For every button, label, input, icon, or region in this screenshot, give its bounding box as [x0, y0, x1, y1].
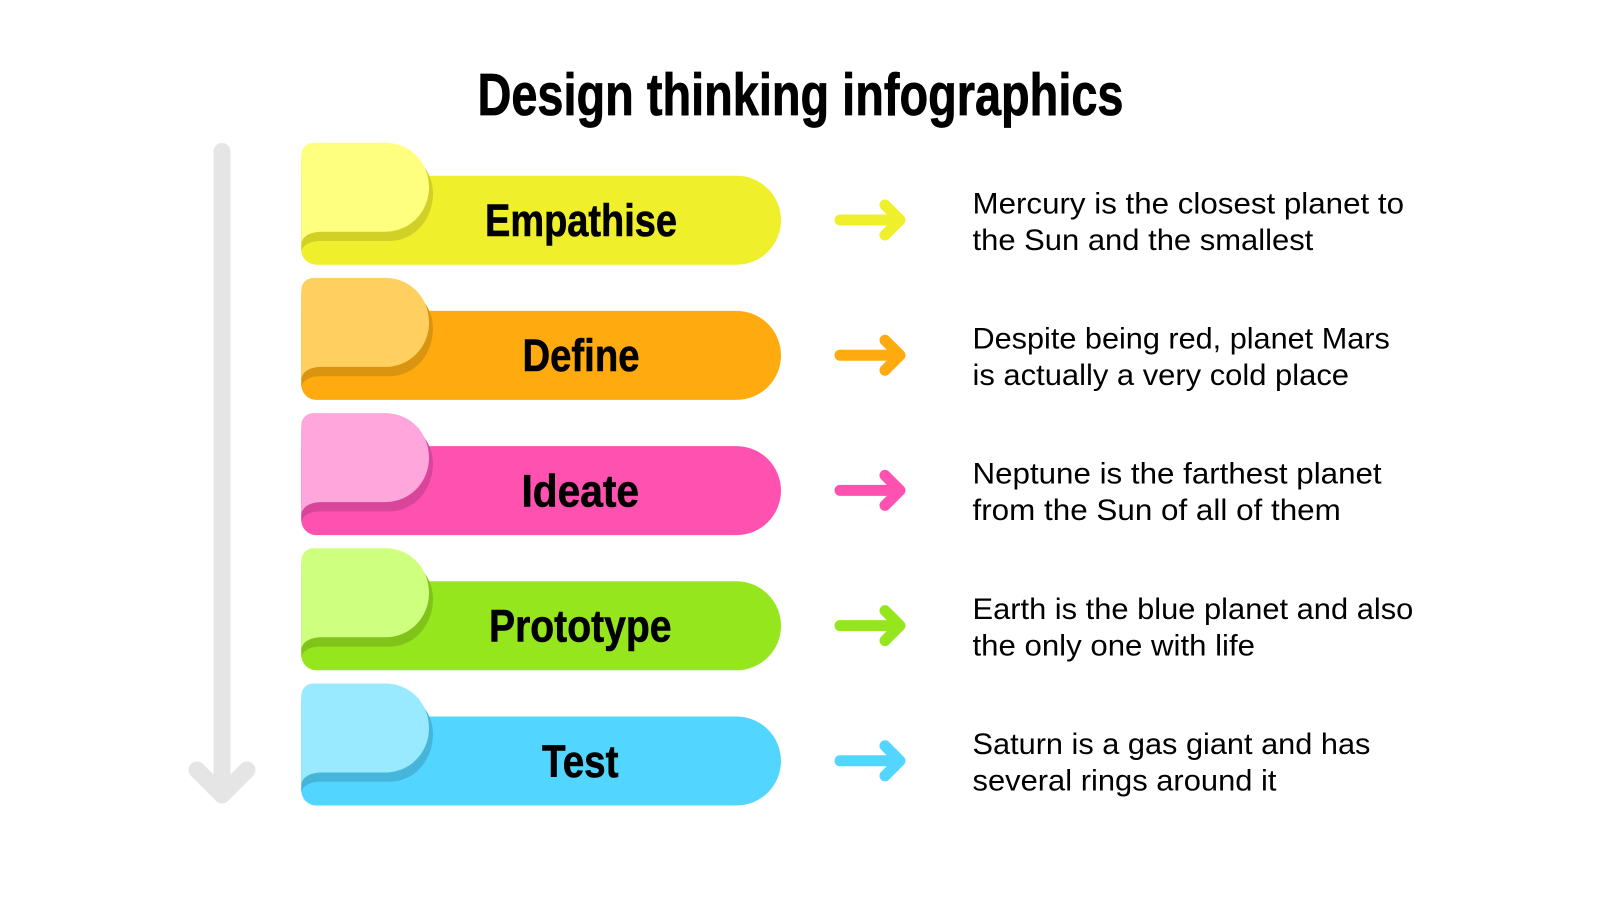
- arrow: Prototype: [840, 611, 900, 641]
- arrow: Empathise: [840, 205, 900, 235]
- description: Prototype: Earth is the blue planet and also: [972, 593, 1413, 626]
- label: Define: Define: [522, 330, 640, 381]
- arrow: Define: [840, 340, 900, 370]
- banner: Define: [301, 278, 781, 400]
- banner: Prototype: [301, 548, 781, 670]
- description: Define: is actually a very cold place: [972, 359, 1349, 392]
- description: Prototype: the only one with life: [972, 629, 1255, 662]
- banner: Ideate: [301, 413, 781, 535]
- step 4: Prototype: [301, 548, 1413, 670]
- label: Empathise: Empathise: [485, 195, 677, 246]
- label: Ideate: Ideate: [522, 465, 639, 516]
- description: Define: [972, 322, 1390, 392]
- description: Test: several rings around it: [972, 765, 1277, 798]
- label: Prototype: Prototype: [489, 601, 672, 652]
- description: Define: Despite being red, planet Mars: [972, 322, 1390, 356]
- description: Empathise: the Sun and the smallest: [972, 224, 1314, 257]
- description: Test: Saturn is a gas giant and has: [972, 728, 1370, 761]
- label: Test: Test: [542, 736, 619, 787]
- step 1: Empathise: [301, 143, 1404, 265]
- description: Ideate: [972, 458, 1382, 527]
- banner: Test: [301, 684, 781, 806]
- arrow: Test: [840, 746, 900, 776]
- description: Empathise: [972, 187, 1404, 257]
- description: Empathise: Mercury is the closest planet to: [972, 187, 1404, 220]
- description: Prototype: [972, 593, 1413, 662]
- banner: Empathise: [301, 143, 781, 265]
- description: Ideate: from the Sun of all of them: [972, 494, 1341, 527]
- arrow: Ideate: [840, 475, 900, 505]
- arrow: vertical process direction: [197, 152, 247, 795]
- title: Design thinking infographics: [478, 62, 1124, 128]
- step 3: Ideate: [301, 413, 1382, 535]
- description: Test: [972, 728, 1370, 798]
- description: Ideate: Neptune is the farthest planet: [972, 458, 1382, 491]
- step 5: Test: [301, 684, 1370, 806]
- step 2: Define: [301, 278, 1390, 400]
